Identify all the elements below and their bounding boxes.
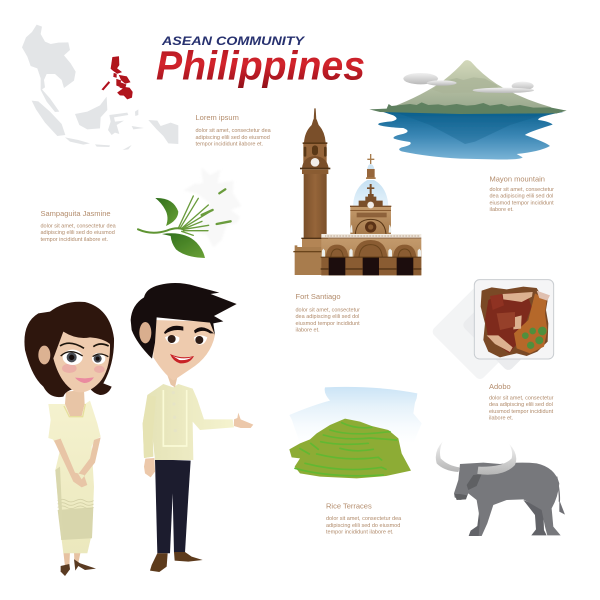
heading: Philippines: Philippines (156, 42, 365, 88)
terraced hill (289, 419, 411, 478)
text block: Mayon mountain: Mayon mountain (490, 174, 545, 184)
buffalo far legs (469, 500, 547, 536)
woman eyes (60, 343, 109, 365)
man teeth (173, 356, 192, 360)
woman face (53, 332, 110, 392)
man hair (131, 283, 237, 359)
woman neckline trim (64, 404, 85, 417)
man shoes (150, 552, 203, 572)
man barong shirt (143, 384, 234, 460)
leaf lower (162, 233, 205, 258)
illustration: Sampaguita jasmine (138, 167, 242, 258)
text block: Sampaguita Jasmine: tempor incididunt ilabore et. (40, 237, 109, 243)
text block: Fort Santiago: dea adipiscing elili sed dol (296, 314, 359, 320)
man trousers (155, 459, 191, 553)
woman cheeks (62, 364, 105, 373)
text block: Lorem ipsum: dolor sit amet, consectetur dea (196, 128, 272, 134)
text block: Sampaguita Jasmine (40, 209, 117, 243)
character: woman in Filipiniana dress (24, 302, 114, 576)
food: pork slices (487, 291, 550, 352)
woman mouth (75, 377, 94, 383)
illustration: Fort Santiago church (293, 108, 421, 275)
title (156, 34, 365, 88)
leaf upper (155, 198, 178, 226)
text block: Mayon mountain (490, 174, 554, 213)
illustration: Adobo dish (431, 278, 555, 381)
text block: Mayon mountain: dolor sit amet, consectetur (490, 187, 554, 193)
woman neck and chest (65, 390, 85, 416)
subtitle: ASEAN COMMUNITY: ASEAN COMMUNITY (161, 34, 305, 48)
cathedral dome (353, 154, 388, 206)
food: pork (485, 293, 532, 353)
text block: Adobo: Adobo (489, 382, 511, 391)
text block: Adobo: dolor sit amet, consectetur (489, 396, 554, 402)
text block: Fort Santiago: dolor sit amet, consectetur (296, 308, 360, 314)
treeline (369, 102, 567, 114)
map of Southeast Asia (22, 25, 178, 150)
text block: Fort Santiago (296, 292, 360, 334)
buffalo horns (436, 442, 460, 472)
woman legs and shoes (61, 552, 96, 576)
man eyes and brows (164, 326, 214, 345)
sky wash (289, 387, 422, 443)
text block: Sampaguita Jasmine: adipiscing elili sed do eiusmod (40, 230, 115, 236)
text block: Adobo: ilabore et. (489, 416, 514, 422)
text block: Adobo: dea adipiscing elili sed dol (489, 402, 553, 408)
woman arms and hands (54, 437, 101, 487)
character: man in barong (131, 283, 253, 572)
food: rice and side (514, 293, 547, 353)
stems and buds (138, 189, 231, 235)
man ear (139, 322, 151, 343)
text block: Lorem ipsum: tempor incididunt ilabore et. (196, 142, 264, 148)
map: neighbouring countries (22, 25, 178, 150)
text block: Lorem ipsum: adipiscing elili sed do eiusmod (196, 135, 270, 141)
text block: Sampaguita Jasmine: Sampaguita Jasmine (40, 209, 111, 218)
buffalo tail (557, 477, 559, 502)
text block: Mayon mountain: dea adipiscing elili sed dol (490, 194, 553, 200)
text block: Lorem ipsum: Lorem ipsum (196, 113, 239, 122)
food (481, 287, 550, 357)
white flowers (183, 167, 242, 247)
map: Philippines highlighted (102, 57, 132, 99)
cathedral lower facade and arches (321, 239, 421, 275)
woman ear (38, 346, 50, 364)
man face (153, 320, 215, 381)
buffalo face shading (455, 474, 482, 500)
man mouth (170, 354, 194, 363)
text block: Mayon mountain: eiusmod tempor incididunt (490, 200, 554, 206)
text block: Mayon mountain: ilabore et. (490, 207, 514, 213)
illustration: water buffalo (436, 442, 565, 536)
man neck (165, 368, 179, 387)
cathedral upper facade (350, 202, 391, 234)
text block: Lorem ipsum (196, 113, 272, 148)
terrace ridges (295, 423, 397, 476)
mountain (392, 60, 552, 112)
man left hand (144, 458, 155, 477)
text block: Rice Terraces: tempor incididunt ilabore et. (326, 530, 394, 536)
text block: Sampaguita Jasmine: dolor sit amet, consectetur dea (40, 224, 117, 230)
illustration: Mayon mountain (369, 60, 567, 159)
text block: Rice Terraces (326, 502, 402, 536)
text block: Rice Terraces: adipiscing elili sed do eiusmod (326, 523, 400, 529)
upper mountain ridge (432, 77, 500, 93)
balustrade (321, 234, 421, 239)
plate shadow diamonds (431, 278, 555, 381)
woman dress (48, 401, 101, 553)
reflection (397, 113, 550, 144)
text block: Rice Terraces: Rice Terraces (326, 502, 372, 510)
plate (474, 280, 554, 359)
text block: Fort Santiago: ilabore et. (296, 328, 320, 334)
cloud left (403, 73, 457, 86)
food: green vegetables (522, 327, 547, 349)
food: sauce (481, 287, 548, 357)
woman hair back (24, 302, 114, 397)
cloud right (473, 82, 534, 93)
text block: Adobo: eiusmod tempor incididunt (489, 409, 554, 415)
text block: Fort Santiago: eiusmod tempor incididunt (296, 321, 360, 327)
text block: Rice Terraces: dolor sit amet, consectetur dea (326, 516, 402, 522)
bell tower (293, 108, 330, 275)
text block: Adobo (489, 382, 554, 422)
lake (378, 112, 563, 159)
text block: Fort Santiago: Fort Santiago (296, 292, 341, 301)
man right hand (234, 413, 253, 428)
illustration: Rice terraces (289, 387, 422, 478)
buffalo body (454, 463, 561, 536)
